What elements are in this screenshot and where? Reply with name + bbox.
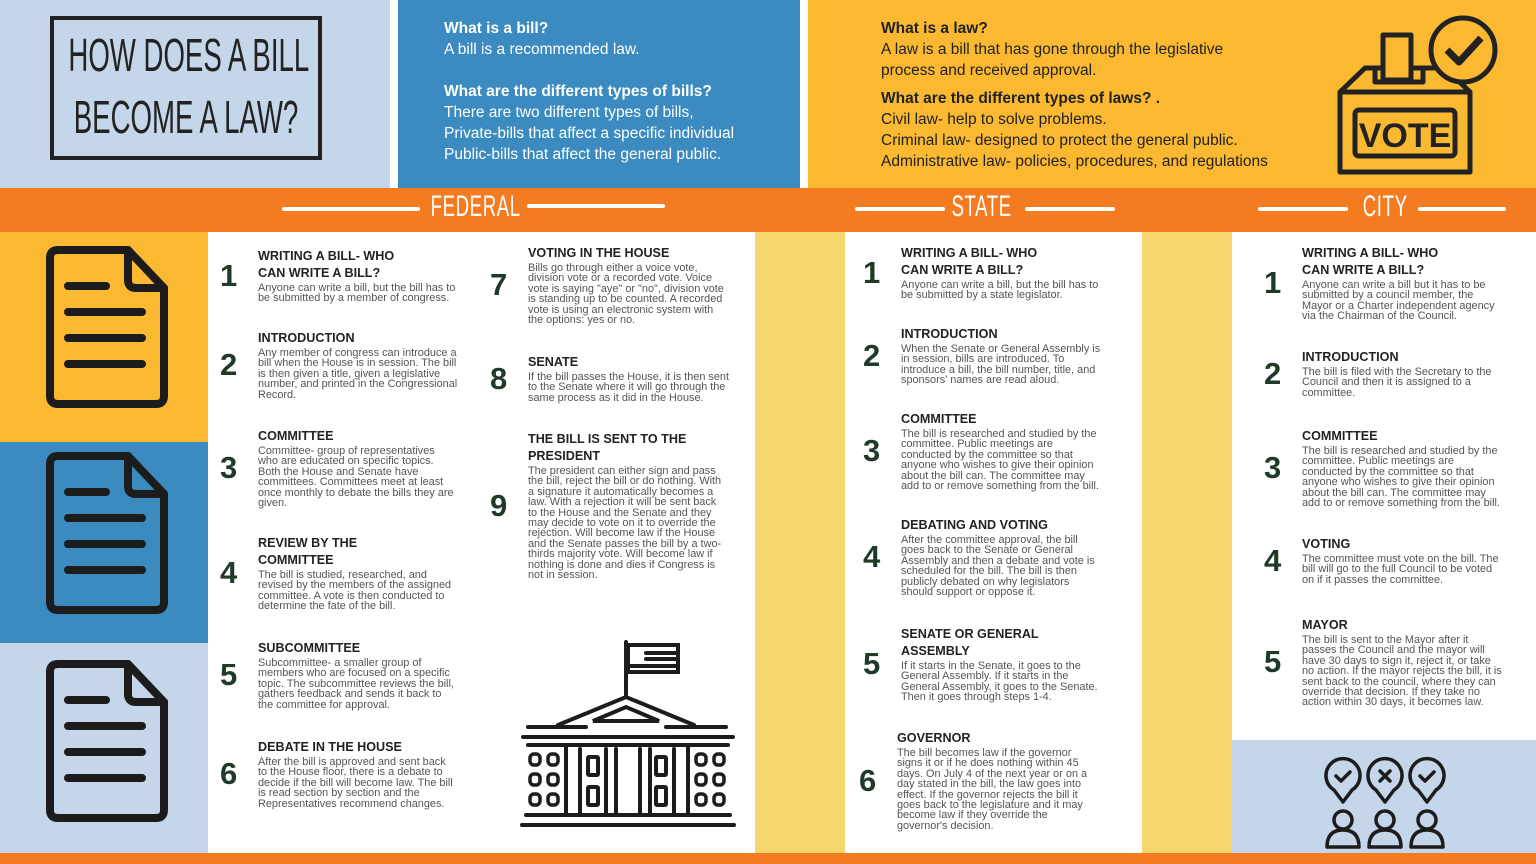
step 7: VOTING IN THE HOUSE <box>528 246 669 260</box>
step 5: SENATE OR GENERAL <box>901 627 1039 641</box>
step 1: WRITING A BILL- WHO <box>258 249 394 263</box>
step 4: scheduled for the bill. The bill is then <box>901 565 1077 577</box>
step 7: the options: yes or no. <box>528 314 635 326</box>
step 5: General Assembly, it goes to the Senate. <box>901 681 1098 693</box>
step 2: 2 <box>1264 356 1281 391</box>
text block: what is a bill: What are the different types of bills? <box>444 83 712 100</box>
step 3: anyone who wishes to give their opinion <box>1302 476 1495 488</box>
panel: federal steps <box>220 246 736 827</box>
icon: capitol building <box>520 640 736 827</box>
step 1: WRITING A BILL- WHO <box>1302 246 1438 260</box>
step 3: given. <box>258 497 287 509</box>
step 3: conducted by the committee so that <box>901 449 1073 461</box>
step 2: is then given a title, given a legislative <box>258 368 440 380</box>
step 6: become law if they override the <box>897 809 1048 821</box>
text block: what is a law: process and received approval. Civil law- help to solve problems. <box>881 62 1107 128</box>
step 2 <box>220 331 457 401</box>
step 1: CAN WRITE A BILL? <box>258 266 380 280</box>
step 2 <box>863 327 1100 386</box>
step 5: members who are focused on a specific <box>258 667 450 679</box>
step 3: about the bill can. The committee may <box>1302 487 1486 499</box>
step 5: If it starts in the Senate, it goes to the <box>901 660 1081 672</box>
step 5: sent back to the council, where they can <box>1302 676 1496 688</box>
step 3: who are educated on specific topics. <box>258 455 434 467</box>
step 1: via the Chairman of the Council. <box>1302 310 1457 322</box>
step 4: publicly debated on why legislators <box>901 576 1069 588</box>
step 6: After the bill is approved and sent back <box>258 756 446 768</box>
step 8: SENATE <box>528 355 578 369</box>
text block: what is a bill: A bill is a recommended law. <box>444 41 640 58</box>
step 4: 4 <box>863 539 880 574</box>
step 5: gathers feedback and sends it back to <box>258 688 441 700</box>
step 5: Then it goes through steps 1-4. <box>901 691 1052 703</box>
step 9: The president can either sign and pass <box>528 465 716 477</box>
step 6: 6 <box>220 756 237 791</box>
step 8: same process as it did in the House. <box>528 392 704 404</box>
step 1: CAN WRITE A BILL? <box>1302 263 1424 277</box>
step 2: bill when the House is in session. The bill <box>258 357 456 369</box>
step 6: The bill becomes law if the governor <box>897 747 1071 759</box>
step 7 <box>490 246 724 326</box>
text block: what is a law: Administrative law- policies, procedures, and regulations <box>881 153 1268 170</box>
step 9: law. With a rejection it will be sent back <box>528 496 716 508</box>
step 9: a signature it automatically becomes a <box>528 486 713 498</box>
text block: what is a bill: Private-bills that affect a specific individual <box>444 125 734 142</box>
step 5: the committee for approval. <box>258 699 390 711</box>
step 5: General Assembly. If it starts in the <box>901 670 1068 682</box>
step 1: Anyone can write a bill, but the bill has to <box>258 282 455 294</box>
step 5: MAYOR <box>1302 618 1348 632</box>
step 9 <box>490 432 721 581</box>
step 3: committee. Public meetings are <box>1302 455 1454 467</box>
step 1: submitted by a council member, the <box>1302 289 1473 301</box>
step 4 <box>863 518 1095 598</box>
step 2: 2 <box>220 347 237 382</box>
step 5: have 30 days to sign it, reject it, or take <box>1302 655 1491 667</box>
step 2: sponsors' names are read aloud. <box>901 374 1059 386</box>
step 3: anyone who wishes to give their opinion <box>901 459 1094 471</box>
step 9: the bill, reject the bill or do nothing. With <box>528 475 721 487</box>
step 5: action within 30 days, it becomes law. <box>1302 696 1484 708</box>
step 3: committee. Public meetings are <box>901 438 1053 450</box>
text block: what is a bill: There are two different types of bills, <box>444 104 694 121</box>
step 5: no action. If the mayor rejects the bill, it is <box>1302 665 1502 677</box>
step 5 <box>1264 618 1502 708</box>
step 4: determine the fate of the bill. <box>258 600 395 612</box>
step 9: thirds majority vote. Will become law if <box>528 548 713 560</box>
text block: what is a law <box>881 20 1268 170</box>
step 4 <box>220 536 451 612</box>
step 1: CAN WRITE A BILL? <box>901 263 1023 277</box>
step 4: goes back to the Senate or General <box>901 544 1073 556</box>
title: BECOME A LAW? <box>74 91 298 143</box>
step 3: Committee- group of representatives <box>258 445 435 457</box>
step 6: days. On July 4 of the next year or on a <box>897 768 1087 780</box>
orange band with section headings: STATE <box>952 190 1012 223</box>
step 9: rejection. Will become law if the House <box>528 527 715 539</box>
step 4: COMMITTEE <box>258 553 334 567</box>
step 2: Any member of congress can introduce a <box>258 347 457 359</box>
step 6: DEBATE IN THE HOUSE <box>258 740 402 754</box>
step 3 <box>1264 429 1500 509</box>
text block: what is a bill: What is a bill? <box>444 20 548 37</box>
step 9: PRESIDENT <box>528 449 600 463</box>
step 5: 5 <box>220 657 237 692</box>
step 2 <box>1264 350 1491 399</box>
step 4 <box>1264 537 1499 586</box>
step 7: is standing up to be counted. A recorded <box>528 293 722 305</box>
step 3 <box>220 429 454 509</box>
text block: what is a bill: Public-bills that affect the general public. <box>444 146 721 163</box>
step 7: 7 <box>490 267 507 302</box>
text block: what is a bill <box>444 20 734 163</box>
step 6: Representatives recommend changes. <box>258 798 444 810</box>
step 3: conducted by the committee so that <box>1302 466 1474 478</box>
step 4: should support or oppose it. <box>901 586 1035 598</box>
panel: state steps <box>859 246 1100 832</box>
step 7: division vote or a recorded vote. Voice <box>528 272 712 284</box>
step 7: vote is using an electronic system with <box>528 304 713 316</box>
step 1: 1 <box>1264 265 1281 300</box>
step 9: THE BILL IS SENT TO THE <box>528 432 686 446</box>
step 4: committee. A vote is then conducted to <box>258 590 444 602</box>
step 1: 1 <box>220 258 237 293</box>
step 6: effect. If the governor rejects the bill it <box>897 789 1078 801</box>
step 3: once monthly to debate the bills they are <box>258 487 454 499</box>
icon: vote box: VOTE <box>1359 117 1451 155</box>
step 9: nothing is done and dies if Congress is <box>528 559 715 571</box>
text block: what is a law: A law is a bill that has gone through the legislative <box>881 41 1223 58</box>
step 6: governor's decision. <box>897 820 994 832</box>
step 1: Anyone can write a bill, but the bill has to <box>901 279 1098 291</box>
step 7: vote is saying "aye" or "no", division vote <box>528 283 724 295</box>
step 3: 3 <box>220 450 237 485</box>
step 5: 5 <box>863 646 880 681</box>
step 5 <box>220 641 454 711</box>
step 5: topic. The subcommittee reviews the bill, <box>258 678 454 690</box>
step 1 <box>220 249 455 304</box>
step 9: and the Senate passes the bill by a two- <box>528 538 721 550</box>
icon: voters <box>1324 756 1446 849</box>
step 1: be submitted by a member of congress. <box>258 292 449 304</box>
step 5: override that decision. If they take no <box>1302 686 1480 698</box>
step 3: Both the House and Senate have <box>258 466 418 478</box>
step 9: 9 <box>490 488 507 523</box>
step 4: 4 <box>220 555 237 590</box>
step 9: to the House and the Senate and they <box>528 507 711 519</box>
step 8: 8 <box>490 361 507 396</box>
panel: city steps <box>1264 246 1502 708</box>
step 4: DEBATING AND VOTING <box>901 518 1048 532</box>
step 6: GOVERNOR <box>897 731 970 745</box>
title: HOW DOES A BILL <box>68 29 309 81</box>
step 5: The bill is sent to the Mayor after it <box>1302 634 1468 646</box>
step 1 <box>863 246 1098 301</box>
step 5 <box>863 627 1098 703</box>
step 3: committees. Committees meet at least <box>258 476 443 488</box>
step 6: 6 <box>859 763 876 798</box>
step 1: 1 <box>863 255 880 290</box>
step 8 <box>490 355 729 404</box>
step 3: 3 <box>1264 450 1281 485</box>
step 1: be submitted by a state legislator. <box>901 289 1063 301</box>
step 4: Assembly and then a debate and vote is <box>901 555 1095 567</box>
step 6: decide if the bill will become law. The bill <box>258 777 453 789</box>
step 2: When the Senate or General Assembly is <box>901 343 1100 355</box>
step 2: Record. <box>258 389 296 401</box>
step 4: 4 <box>1264 543 1281 578</box>
step 2: introduce a bill, the bill number, title, and <box>901 364 1095 376</box>
icon: documents <box>46 246 168 822</box>
step 5: Subcommittee- a smaller group of <box>258 657 421 669</box>
step 3 <box>863 412 1099 492</box>
step 1: WRITING A BILL- WHO <box>901 246 1037 260</box>
step 3: The bill is researched and studied by the <box>901 428 1097 440</box>
step 1: Mayor or a Charter independent agency <box>1302 300 1495 312</box>
step 3: The bill is researched and studied by the <box>1302 445 1498 457</box>
step 6: day stated in the bill, the law goes into <box>897 778 1081 790</box>
step 2: INTRODUCTION <box>1302 350 1399 364</box>
step 2: 2 <box>863 338 880 373</box>
step 2: Council and then it is assigned to a <box>1302 376 1471 388</box>
step 9: may decide to vote on it to override the <box>528 517 716 529</box>
step 4: VOTING <box>1302 537 1350 551</box>
step 5: passes the Council and the mayor will <box>1302 644 1485 656</box>
step 5: ASSEMBLY <box>901 644 970 658</box>
step 1 <box>1264 246 1495 322</box>
orange band with section headings <box>0 188 1536 232</box>
step 6: to the House floor, there is a debate to <box>258 766 443 778</box>
text block: what is a law: What are the different types of laws? . <box>881 90 1160 107</box>
step 5: 5 <box>1264 644 1281 679</box>
step 2: The bill is filed with the Secretary to the <box>1302 366 1491 378</box>
step 3: about the bill can. The committee may <box>901 470 1085 482</box>
step 4: REVIEW BY THE <box>258 536 357 550</box>
icon: vote box <box>1338 16 1498 174</box>
text block: what is a law: What is a law? <box>881 20 988 37</box>
step 3: COMMITTEE <box>901 412 977 426</box>
step 6 <box>859 731 1088 832</box>
step 2: committee. <box>1302 387 1355 399</box>
step 8: to the Senate where it will go through the <box>528 381 725 393</box>
step 8: If the bill passes the House, it is then sent <box>528 371 729 383</box>
step 2: in session, bills are introduced. To <box>901 353 1064 365</box>
text block: what is a law: Criminal law- designed to protect the general public. <box>881 132 1238 149</box>
step 6: goes back to the legislature and it may <box>897 799 1083 811</box>
step 7: Bills go through either a voice vote, <box>528 262 698 274</box>
step 1: Anyone can write a bill but it has to be <box>1302 279 1485 291</box>
step 2: INTRODUCTION <box>258 331 355 345</box>
step 5: SUBCOMMITTEE <box>258 641 360 655</box>
step 2: number, and printed in the Congressional <box>258 378 457 390</box>
step 2: INTRODUCTION <box>901 327 998 341</box>
step 6 <box>220 740 453 810</box>
step 4: The bill is studied, researched, and <box>258 569 427 581</box>
step 4: on if it passes the committee. <box>1302 574 1443 586</box>
step 4: The committee must vote on the bill. The <box>1302 553 1499 565</box>
step 4: bill will go to the full Council to be voted <box>1302 563 1492 575</box>
step 6: signs it or if he does nothing within 45 <box>897 757 1079 769</box>
step 3: COMMITTEE <box>1302 429 1378 443</box>
step 3: COMMITTEE <box>258 429 334 443</box>
orange band with section headings: FEDERAL <box>431 190 521 223</box>
step 3: 3 <box>863 433 880 468</box>
step 3: add to or remove something from the bill. <box>901 480 1099 492</box>
step 4: After the committee approval, the bill <box>901 534 1078 546</box>
step 9: not in session. <box>528 569 598 581</box>
orange band with section headings: CITY <box>1363 190 1407 223</box>
step 4: revised by the members of the assigned <box>258 579 451 591</box>
step 6: is read section by section and the <box>258 787 420 799</box>
step 3: add to or remove something from the bill. <box>1302 497 1500 509</box>
title <box>50 16 322 160</box>
